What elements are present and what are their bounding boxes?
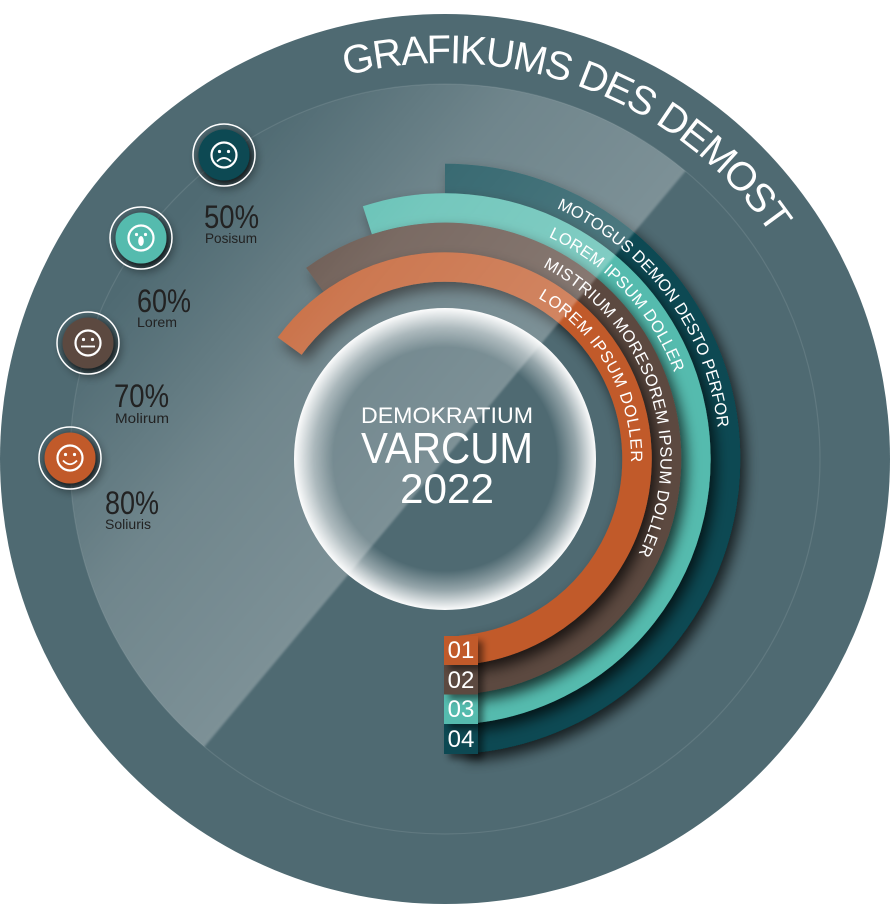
- stat: 60% Lorem: 60%: [137, 283, 191, 319]
- stat: 80% Soliuris: Soliuris: [105, 516, 151, 532]
- tab 02: [444, 665, 478, 694]
- label arc 03: LOREM IPSUM DOLLER: [550, 227, 684, 372]
- stat: 60% Lorem: Lorem: [137, 314, 177, 330]
- arc 03: light teal: [367, 208, 696, 710]
- tab 01: [444, 636, 478, 665]
- icon: surprised face 60%: [110, 207, 175, 273]
- centre glass circle: [294, 308, 596, 610]
- centre line 1: DEMOKRATIUM: [361, 403, 533, 428]
- arc 01: orange: [290, 267, 637, 650]
- stat: 70% Molirum: Molirum: [115, 410, 169, 426]
- stat: 70% Molirum: 70%: [114, 378, 169, 414]
- centre text: [361, 403, 533, 512]
- stat: 60% Lorem: [137, 283, 191, 330]
- arc 04: dark teal: [445, 178, 726, 739]
- arc 02: brown: [315, 238, 666, 680]
- stat: 50% Posisum: [204, 199, 259, 246]
- stat: 80% Soliuris: 80%: [105, 485, 159, 521]
- stat: 50% Posisum: Posisum: [205, 230, 257, 246]
- stat: 80% Soliuris: [105, 485, 159, 532]
- label arc 02: MISTRIUM MORESOREM IPSUM DOLLER: [544, 258, 672, 556]
- tab numbers: [448, 637, 474, 753]
- icon: sad face 50%: [193, 124, 258, 190]
- number 01: 01: [448, 637, 474, 664]
- tab 03: [444, 694, 478, 724]
- centre line 2: VARCUM: [361, 424, 533, 473]
- number 04: 04: [448, 726, 474, 753]
- icon: neutral face 70%: [57, 312, 122, 378]
- label arc 01: LOREM IPSUM DOLLER: [539, 288, 642, 462]
- centre line 3: 2022: [400, 465, 494, 512]
- title: GRAFIKUMS DES DEMOST: [344, 35, 794, 227]
- stat: 70% Molirum: [114, 378, 169, 426]
- number 02: 02: [448, 667, 474, 694]
- label arc 04: MOTOGUS DEMON DESTO PERFOR: [558, 198, 728, 428]
- arc labels: [539, 198, 728, 556]
- icon: happy face 80%: [39, 427, 104, 493]
- number tabs: [444, 636, 478, 754]
- number 03: 03: [448, 696, 474, 723]
- stat: 50% Posisum: 50%: [204, 199, 259, 235]
- diagonal light band: [72, 84, 686, 747]
- tab 04: [444, 724, 478, 754]
- inner ring outline: [70, 84, 820, 834]
